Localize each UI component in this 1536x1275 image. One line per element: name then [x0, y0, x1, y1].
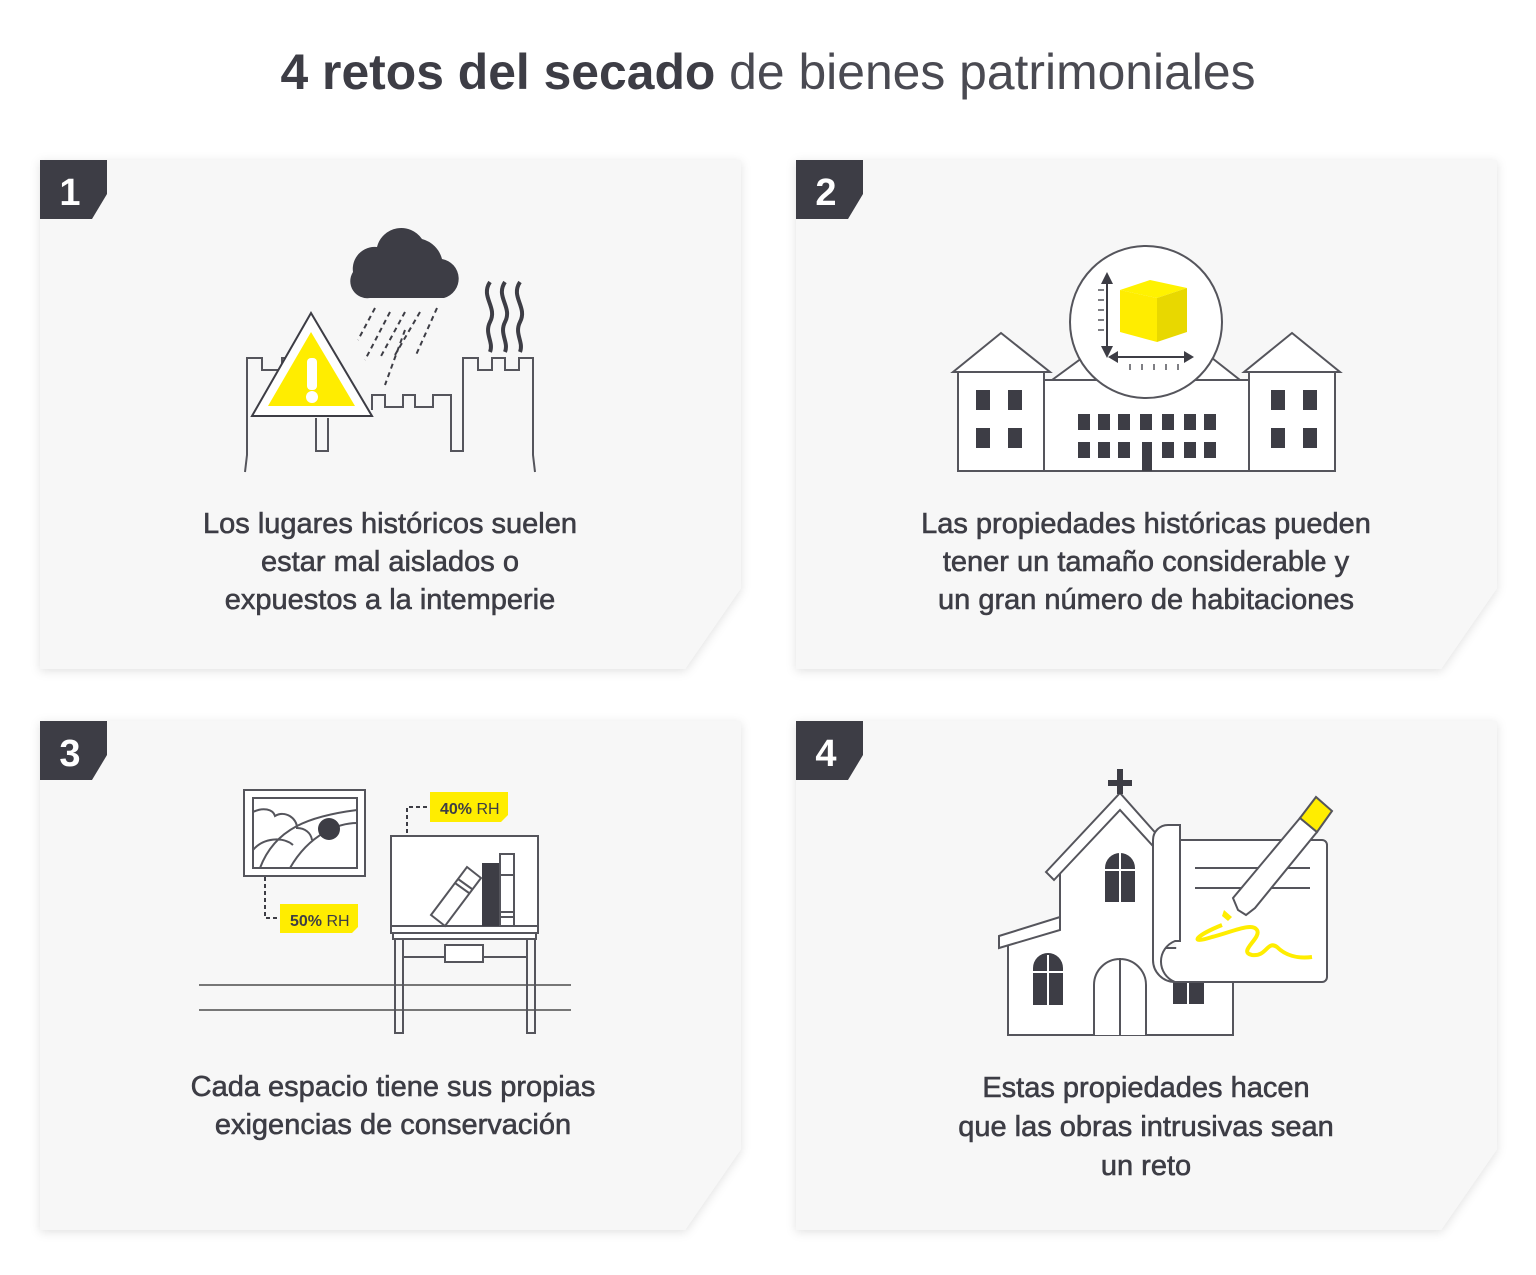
text 4: un reto — [1101, 1150, 1191, 1182]
label 40% RH: 40% RH — [440, 801, 500, 818]
text 3: Cada espacio tiene sus propias — [191, 1071, 595, 1103]
icon: castle with storm — [245, 228, 535, 472]
badge 2 — [796, 160, 863, 219]
text 3: exigencias de conservación — [215, 1109, 571, 1141]
badge 3: 3 — [59, 733, 81, 775]
badge 4 — [796, 721, 863, 780]
text 1: estar mal aislados o — [261, 546, 519, 578]
label 50% RH — [280, 904, 358, 933]
text 2: Las propiedades históricas pueden — [921, 508, 1371, 540]
text 4: Estas propiedades hacen — [982, 1072, 1310, 1104]
badge 2: 2 — [815, 172, 837, 214]
text 2: un gran número de habitaciones — [938, 584, 1354, 616]
panel: 2 — [796, 160, 1497, 669]
badge 1: 1 — [59, 172, 81, 214]
label 40% RH — [430, 792, 508, 822]
icon: room with picture and shelf — [199, 790, 571, 1033]
badge 1 — [40, 160, 107, 219]
title: 4 retos del secado de bienes patrimoniales — [280, 44, 1256, 100]
panel: 1 — [40, 160, 741, 669]
badge 4: 4 — [815, 733, 837, 775]
label 50% RH: 50% RH — [290, 913, 350, 930]
text 1: Los lugares históricos suelen — [203, 508, 577, 540]
badge 3 — [40, 721, 107, 780]
text 2: tener un tamaño considerable y — [943, 546, 1350, 578]
icon: church and document — [999, 769, 1332, 1035]
text 1: expuestos a la intemperie — [225, 584, 555, 616]
panel: 3 — [40, 721, 741, 1230]
text 4: que las obras intrusivas sean — [958, 1111, 1334, 1143]
icon: large building — [953, 246, 1340, 471]
panel: 4 — [796, 721, 1497, 1230]
